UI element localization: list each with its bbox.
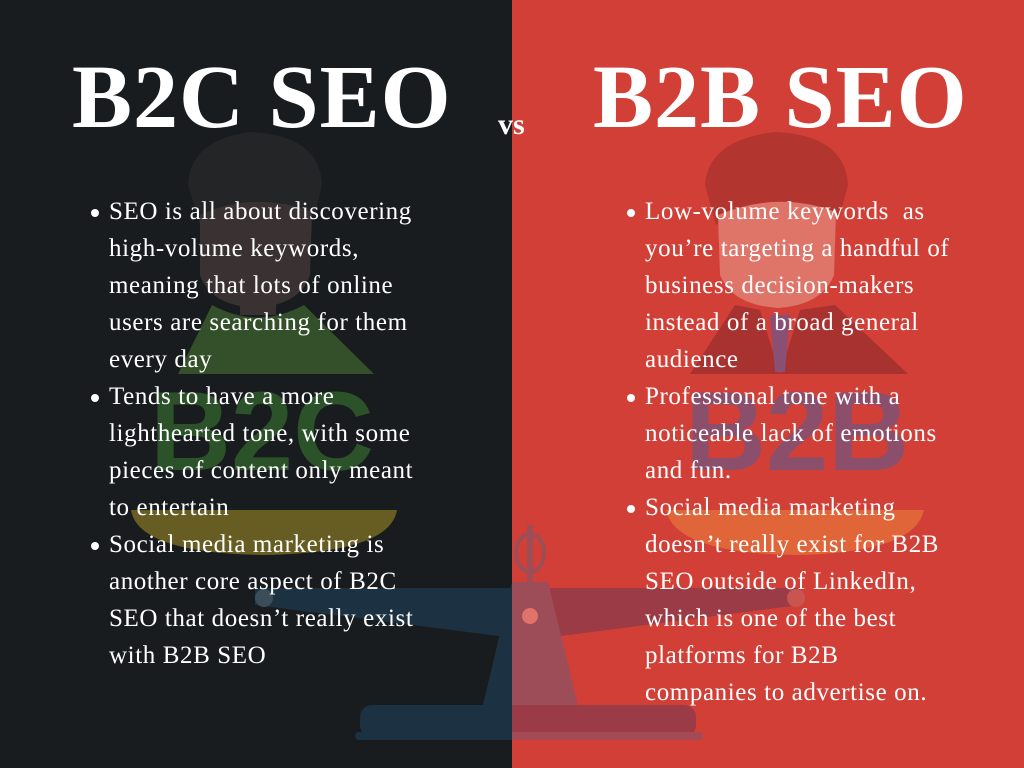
text block: B2B bullets: business decision-makers — [645, 272, 914, 299]
text block: B2C bullets: meaning that lots of online — [109, 272, 393, 299]
text block: B2B bullets: Low-volume keywords as — [645, 198, 925, 225]
panel: right red background — [512, 0, 1024, 768]
icon: B2C person — [131, 132, 397, 555]
text block: B2C bullets: to entertain — [109, 494, 229, 521]
icon: B2B person: B2B — [685, 369, 909, 494]
text block: B2B bullets: platforms for B2B — [645, 642, 839, 669]
text block: B2C bullets: high-volume keywords, — [109, 235, 359, 262]
text block: B2B bullets: you’re targeting a handful of — [645, 235, 949, 262]
title: B2B SEO: B2B SEO — [593, 48, 968, 147]
text block: B2C bullets: Social media marketing is — [109, 531, 384, 558]
text block: B2B bullets: SEO outside of LinkedIn, — [645, 568, 916, 595]
icon: B2C person: B2C — [150, 369, 374, 494]
text block: B2C bullets: users are searching for them — [109, 309, 408, 336]
text block: B2C bullets: every day — [109, 346, 212, 373]
text block: B2B bullets — [627, 198, 949, 706]
text block: B2B bullets: Social media marketing — [645, 494, 896, 521]
text block: B2B bullets: Professional tone with a — [645, 383, 900, 410]
text block: B2C bullets — [91, 198, 413, 669]
text block: B2B bullets: doesn’t really exist for B2B — [645, 531, 939, 558]
title: B2C SEO: B2C SEO — [72, 48, 452, 147]
illustration: faded figures and balance scale — [131, 132, 924, 740]
text block: B2C bullets: SEO is all about discovering — [109, 198, 412, 225]
text block: B2B bullets: instead of a broad general — [645, 309, 919, 336]
text block: B2C bullets: another core aspect of B2C — [109, 568, 397, 595]
text block: B2C bullets: SEO that doesn’t really exist — [109, 605, 413, 632]
text block: B2C bullets: with B2B SEO — [109, 642, 266, 669]
title: vs: vs — [498, 108, 525, 141]
text block: B2B bullets: which is one of the best — [645, 605, 896, 632]
text block: B2B bullets: audience — [645, 346, 739, 373]
text block: B2B bullets: noticeable lack of emotions — [645, 420, 937, 447]
text block: B2C bullets: lighthearted tone, with some — [109, 420, 410, 447]
icon: B2B person — [666, 132, 924, 555]
text block: B2C bullets: Tends to have a more — [109, 383, 334, 410]
text block: B2B bullets: companies to advertise on. — [645, 679, 927, 706]
text block: B2C bullets: pieces of content only meant — [109, 457, 413, 484]
icon: balance scale — [255, 525, 805, 740]
text block: B2B bullets: and fun. — [645, 457, 732, 484]
